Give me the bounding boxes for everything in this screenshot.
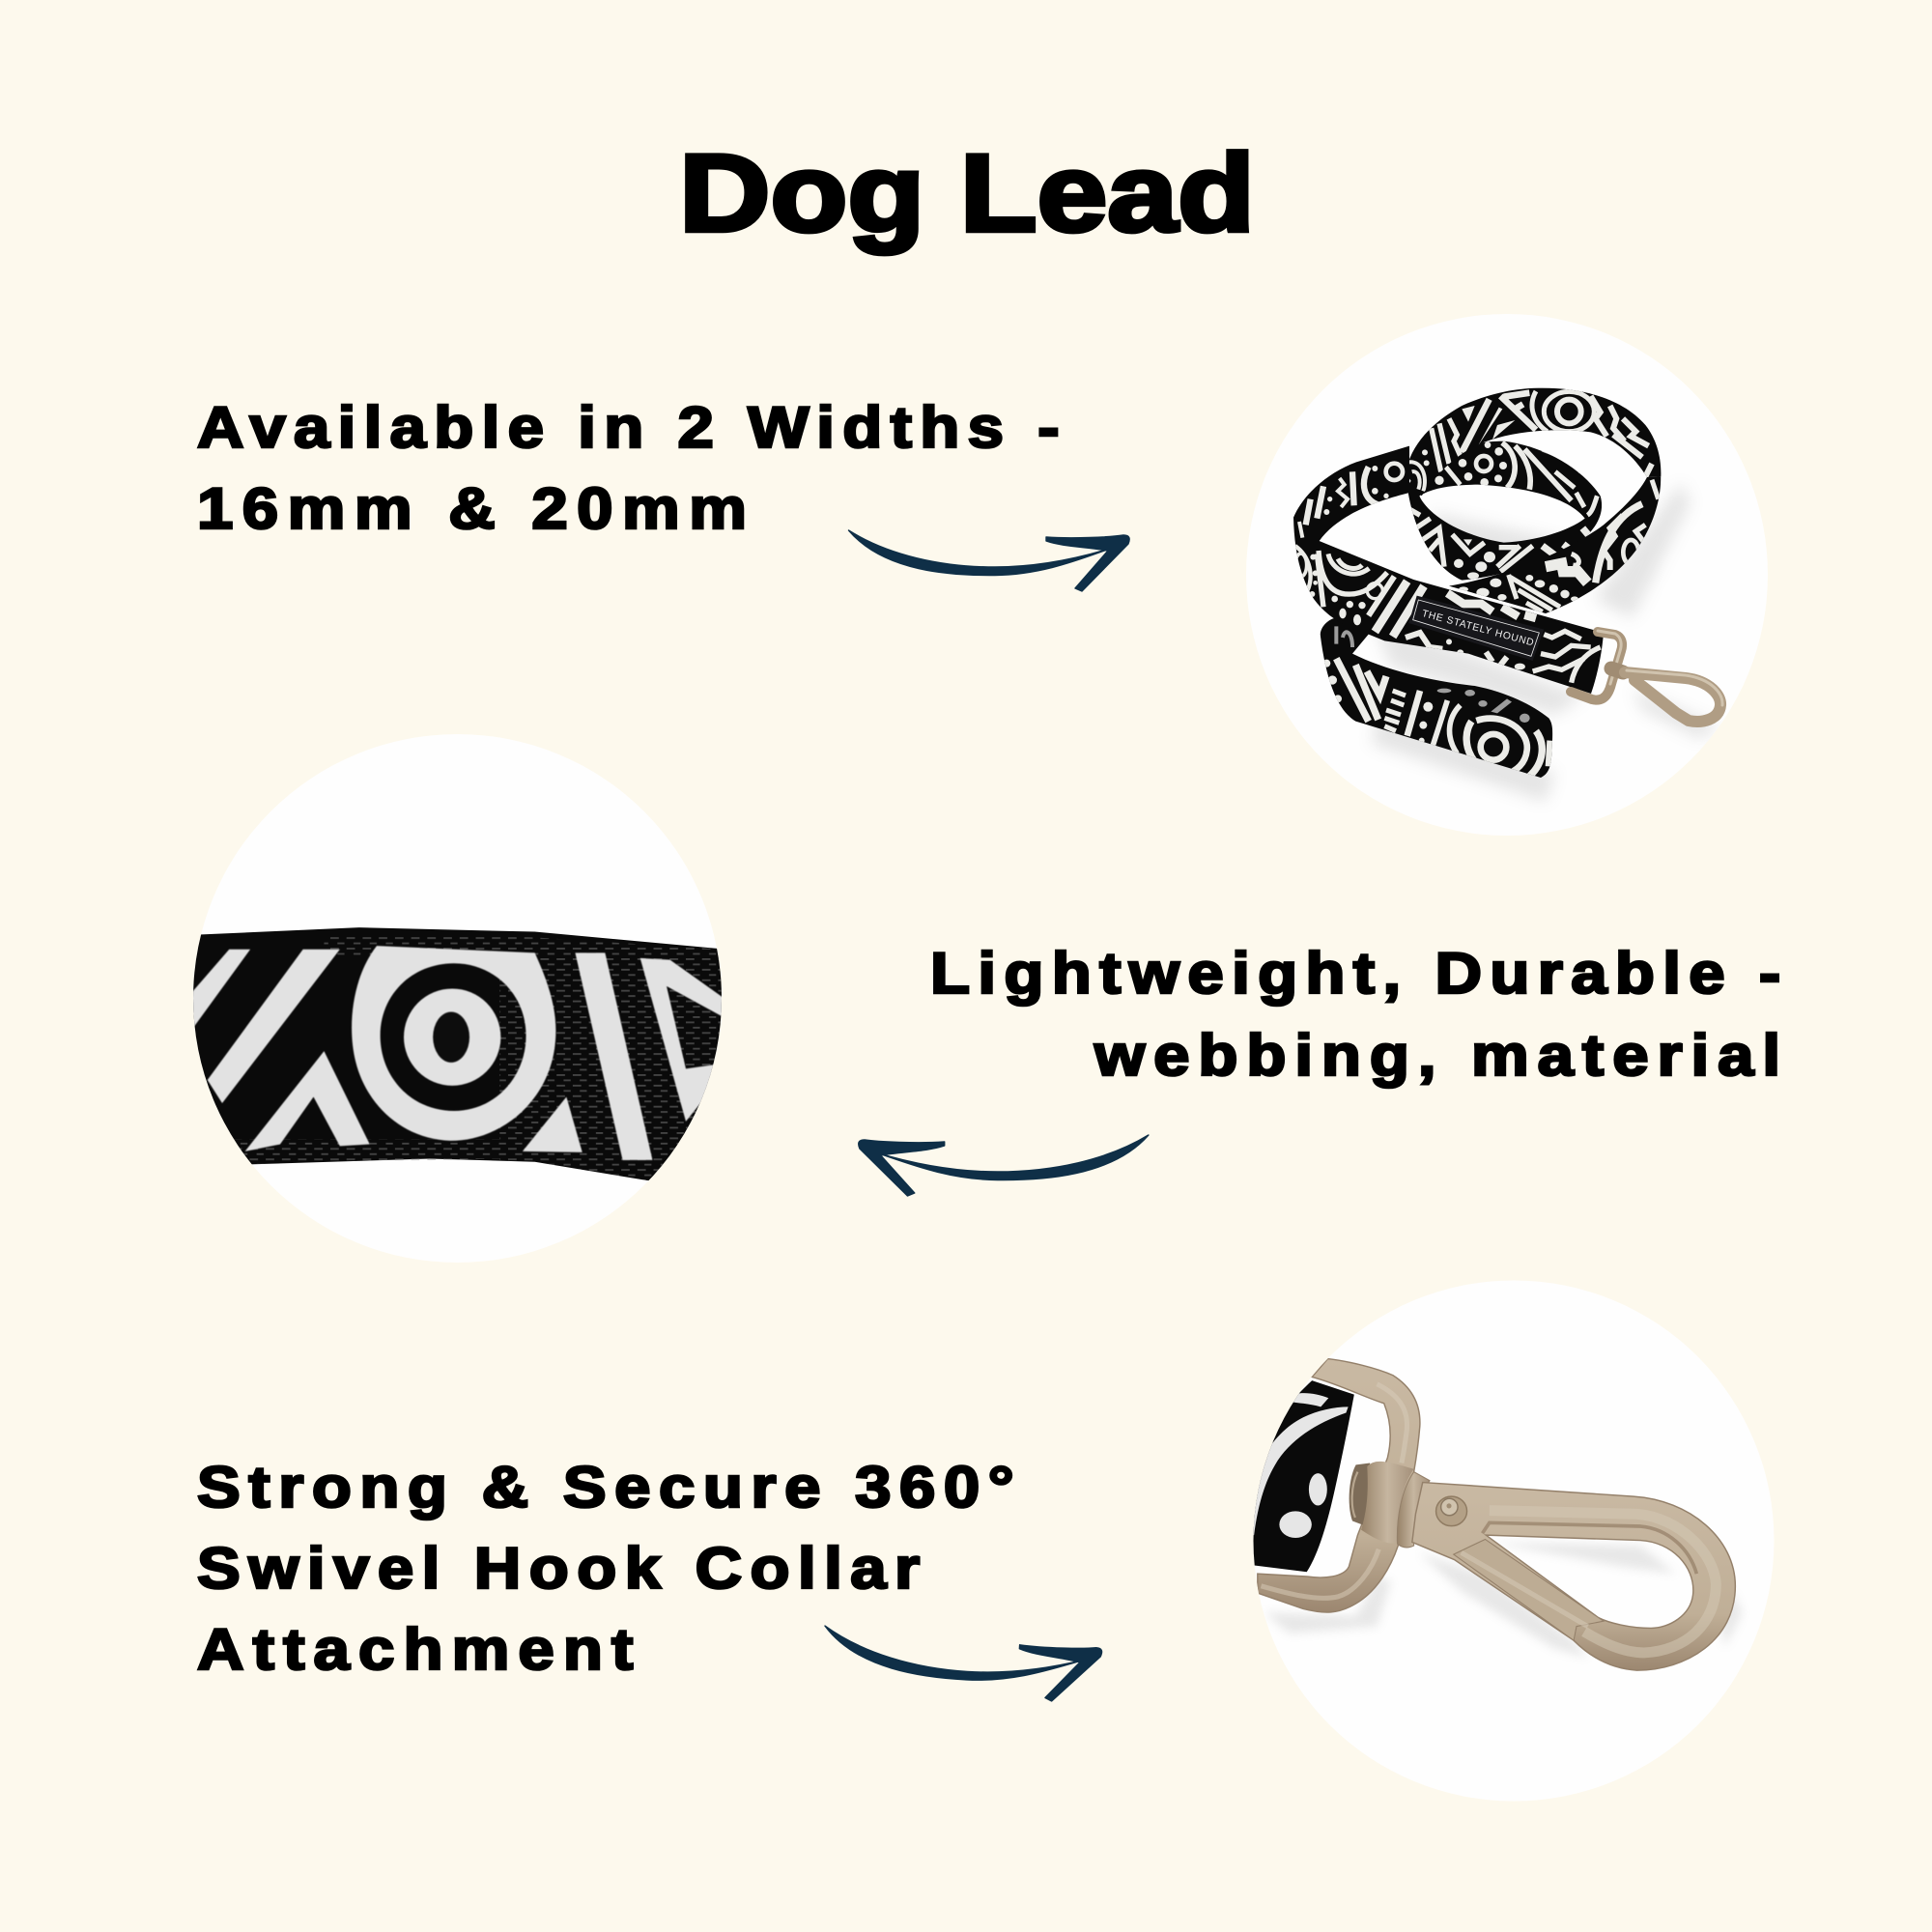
ring section: [1408, 440, 1602, 581]
arrow: to lead photo: [848, 530, 1129, 591]
text block: widths: Available in 2 Widths -: [197, 395, 1060, 460]
webbing: [1251, 1380, 1354, 1572]
snap hook body: [1412, 1483, 1735, 1670]
webbing band: [184, 927, 734, 1184]
arrow: to webbing close-up: [859, 1135, 1149, 1196]
text block: swivel hook: Swivel Hook Collar: [197, 1536, 920, 1601]
upper strip marks: [1306, 467, 1381, 525]
swivel pin: [1350, 1463, 1370, 1526]
text block: material: webbing, material: [1094, 1023, 1780, 1088]
text block: widths: 16mm & 20mm: [197, 476, 747, 541]
text block: swivel hook: Strong & Secure 360°: [197, 1455, 1014, 1520]
brand label: THE STATELY HOUND: [1421, 609, 1535, 648]
snap gate: [1454, 1539, 1604, 1640]
handle and main strap: [1288, 441, 1610, 782]
panel: webbing close-up: [184, 734, 734, 1263]
text block: material: [930, 941, 1780, 1088]
hook shadow: [1264, 1542, 1743, 1658]
top band section: [1409, 388, 1662, 497]
webbing pattern: [184, 946, 734, 1160]
brand label: [1408, 596, 1544, 661]
rivet: [1436, 1496, 1467, 1526]
small swivel hook: [1571, 631, 1722, 722]
title: Dog Lead: [679, 132, 1255, 255]
text block: swivel hook: Attachment: [197, 1617, 633, 1682]
panel: swivel hook close-up: [1251, 1281, 1774, 1801]
lead shadow: [1372, 483, 1719, 802]
text block: material: Lightweight, Durable -: [930, 941, 1780, 1006]
panel: full lead photo: [1246, 314, 1768, 836]
hook highlights: [1490, 1511, 1716, 1653]
webbing centre: [433, 1011, 469, 1063]
arrow: to hook photo: [821, 1626, 1102, 1704]
text block: widths: [197, 395, 1060, 541]
text block: swivel hook: [197, 1455, 1014, 1682]
handle loop: [1320, 618, 1553, 778]
D-ring: [1258, 1359, 1420, 1612]
swivel collar: [1361, 1462, 1414, 1543]
upper lead loops: [1408, 388, 1662, 613]
main strap: [1288, 441, 1610, 698]
long band section: [1449, 477, 1662, 613]
